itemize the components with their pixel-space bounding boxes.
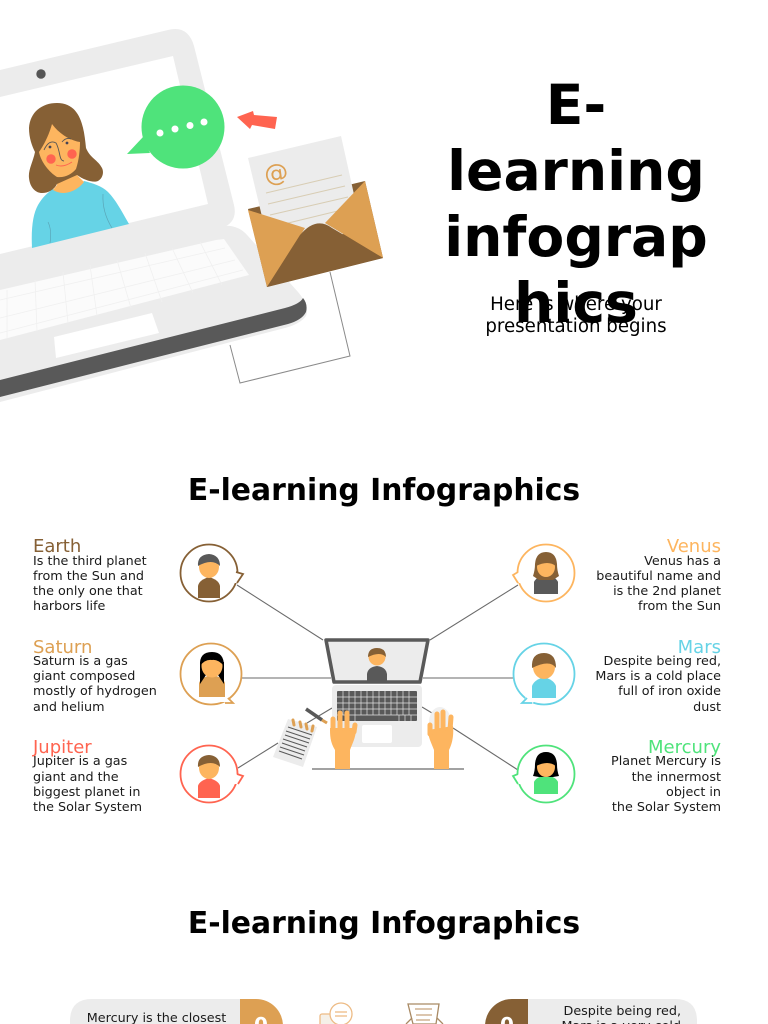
outlined paper behind laptop — [230, 272, 350, 383]
main title: hics — [514, 272, 638, 336]
section heading 1: E-learning Infographics — [188, 473, 580, 508]
laptop base dark edge — [0, 298, 307, 397]
text block: Earth — [33, 536, 147, 614]
avatar: Earth — [180, 544, 243, 602]
text block: Venus — [596, 536, 721, 614]
text block: Jupiter: biggest planet in — [33, 785, 140, 800]
right hand — [428, 712, 453, 769]
text block: Jupiter: Jupiter — [32, 737, 92, 758]
left pill: Mercury — [70, 999, 283, 1024]
text block: Earth: harbors life — [33, 599, 106, 614]
text block: Venus: Venus — [667, 536, 721, 557]
text block: Venus: is the 2nd planet — [613, 584, 721, 599]
central laptop illustration — [273, 640, 453, 769]
text block: Mars: full of iron oxide — [618, 684, 721, 699]
text block: Mercury — [611, 737, 721, 815]
red arrow — [237, 111, 277, 129]
section heading 2: E-learning Infographics — [188, 906, 580, 941]
subtitle: Here is where your — [490, 294, 662, 315]
avatar: Mars — [514, 644, 574, 704]
text block: Mars: Despite being red, — [604, 654, 721, 669]
person on screen — [29, 103, 129, 248]
notepad and pencil — [273, 709, 327, 767]
text block: Mars: Mars — [678, 637, 721, 658]
trackpad — [54, 313, 159, 358]
left hand — [330, 713, 356, 769]
avatar: Mercury — [513, 746, 574, 802]
presenter on screen — [367, 648, 387, 682]
main title: infograp — [444, 206, 708, 270]
text block: Earth: Earth — [33, 536, 81, 557]
text block: Jupiter: the Solar System — [33, 800, 142, 815]
avatar: Venus — [513, 544, 574, 602]
hero illustration: laptop, person, chat bubble and envelope — [0, 29, 383, 402]
chat bubble — [127, 86, 224, 168]
text block: Mars: dust — [693, 700, 721, 715]
text block: Saturn: giant composed — [33, 669, 135, 684]
laptop screen — [0, 56, 208, 254]
text block: Saturn: mostly of hydrogen — [33, 684, 157, 699]
mouse — [429, 707, 451, 737]
text block: Mars — [595, 637, 721, 715]
text block: Mercury: the Solar System — [612, 800, 721, 815]
text block: Saturn — [33, 637, 157, 715]
keyboard — [0, 239, 249, 340]
main title — [444, 74, 708, 336]
text block: Mercury: Mercury — [648, 737, 721, 758]
text block: Jupiter — [32, 737, 142, 815]
trackpad — [362, 725, 392, 743]
text block: Mercury: object in — [666, 785, 721, 800]
text block: Mercury: the innermost — [632, 770, 721, 785]
laptop keyboard keys — [337, 691, 417, 721]
subtitle — [485, 294, 667, 337]
text block: Saturn: Saturn — [33, 637, 92, 658]
text block: Earth: Is the third planet — [33, 554, 147, 569]
avatar: Saturn — [180, 644, 242, 704]
text block: Saturn: and helium — [33, 700, 105, 715]
text block: Jupiter: giant and the — [33, 770, 119, 785]
main title: learning — [447, 140, 705, 204]
icon: letter in envelope — [406, 1004, 443, 1024]
laptop screen — [326, 640, 428, 682]
text block: Venus: beautiful name and — [596, 569, 721, 584]
webcam — [36, 69, 46, 79]
subtitle: presentation begins — [485, 316, 667, 337]
text block: Venus: Venus has a — [644, 554, 721, 569]
text block: Earth: the only one that — [33, 584, 143, 599]
text block: Venus: from the Sun — [638, 599, 721, 614]
laptop base — [0, 226, 307, 402]
text block: Jupiter: Jupiter is a gas — [32, 754, 128, 769]
connector lines — [237, 585, 518, 770]
right pill: Mars: Despite being red, — [564, 1004, 681, 1019]
main title: E- — [546, 74, 606, 138]
envelope — [248, 136, 383, 287]
text block: Saturn: Saturn is a gas — [33, 654, 128, 669]
laptop lid — [0, 29, 235, 282]
icon: chat on tablet — [320, 1003, 352, 1024]
laptop base — [332, 685, 422, 747]
text block: Mercury: Planet Mercury is — [611, 754, 721, 769]
right pill: Mars — [485, 999, 697, 1024]
text block: Mars: Mars is a cold place — [595, 669, 721, 684]
avatar: Jupiter — [180, 746, 243, 802]
text block: Earth: from the Sun and — [33, 569, 144, 584]
envelope: @ — [262, 157, 290, 189]
